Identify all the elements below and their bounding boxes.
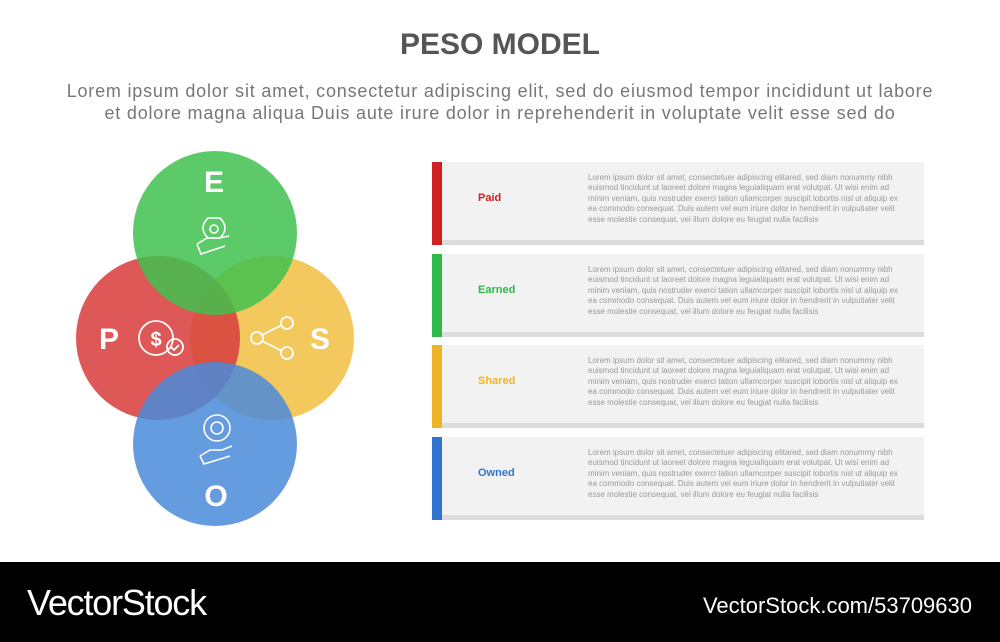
footer	[0, 562, 1000, 642]
row: Paid: Lorem ipsum dolor sit amet, consectetuer adipiscing elitared, sed diam nonummy nibh euismod tincidunt ut laoreet dolore magna leguialiquam erat volutpat. Ut wisi enim ad minim veniam, quis nostruder exerci tation ullamcorper suscipit lobortis nisl ut aliquip ex ea commodo consequat. Duis autem vel eum iriure dolor in hendrerit in vulputiater velit esse molestie consequat, vel illum dolore eu feugiat nulla facilisis	[588, 173, 898, 224]
venn diagram	[76, 151, 354, 526]
row: Paid	[432, 162, 924, 245]
subtitle: Lorem ipsum dolor sit amet, consectetur adipiscing elit, sed do eiusmod tempor incididunt ut labore	[67, 81, 933, 101]
title: PESO MODEL	[400, 28, 600, 61]
row: Owned: Lorem ipsum dolor sit amet, consectetuer adipiscing elitared, sed diam nonummy nibh euismod tincidunt ut laoreet dolore magna leguialiquam erat volutpat. Ut wisi enim ad minim veniam, quis nostruder exerci tation ullamcorper suscipit lobortis nisl ut aliquip ex ea commodo consequat. Duis autem vel eum iriure dolor in hendrerit in vulputiater velit esse molestie consequat, vel illum dolore eu feugiat nulla facilisis	[588, 448, 898, 499]
icon: gear hand	[200, 415, 232, 464]
venn diagram: $	[150, 329, 162, 351]
row: Owned: Owned	[478, 467, 515, 479]
row: Owned	[432, 437, 924, 520]
row: Shared	[432, 345, 924, 428]
venn diagram: P	[99, 323, 119, 356]
row: Shared: Shared	[478, 375, 515, 387]
icon: money bag	[197, 218, 229, 254]
row: Earned: Lorem ipsum dolor sit amet, consectetuer adipiscing elitared, sed diam nonummy nibh euismod tincidunt ut laoreet dolore magna leguialiquam erat volutpat. Ut wisi enim ad minim veniam, quis nostruder exerci tation ullamcorper suscipit lobortis nisl ut aliquip ex ea commodo consequat. Duis autem vel eum iriure dolor in hendrerit in vulputiater velit esse molestie consequat, vel illum dolore eu feugiat nulla facilisis	[588, 265, 898, 316]
venn diagram: O	[204, 480, 228, 513]
row: Earned: Earned	[478, 284, 515, 296]
footer brand: VectorStock	[27, 582, 206, 623]
row: Shared: Lorem ipsum dolor sit amet, consectetuer adipiscing elitared, sed diam nonummy nibh euismod tincidunt ut laoreet dolore magna leguialiquam erat volutpat. Ut wisi enim ad minim veniam, quis nostruder exerci tation ullamcorper suscipit lobortis nisl ut aliquip ex ea commodo consequat. Duis autem vel eum iriure dolor in hendrerit in vulputiater velit esse molestie consequat, vel illum dolore eu feugiat nulla facilisis	[588, 356, 898, 407]
icon: share	[251, 317, 293, 359]
footer url: VectorStock.com/53709630	[703, 593, 972, 618]
venn diagram: S	[310, 323, 330, 356]
venn diagram: E	[204, 166, 224, 199]
row: Paid: Paid	[478, 192, 501, 204]
icon: dollar check	[139, 321, 183, 355]
subtitle: et dolore magna aliqua Duis aute irure dolor in reprehenderit in voluptate velit esse sed do	[104, 103, 896, 123]
row: Earned	[432, 254, 924, 337]
subtitle	[67, 81, 933, 123]
